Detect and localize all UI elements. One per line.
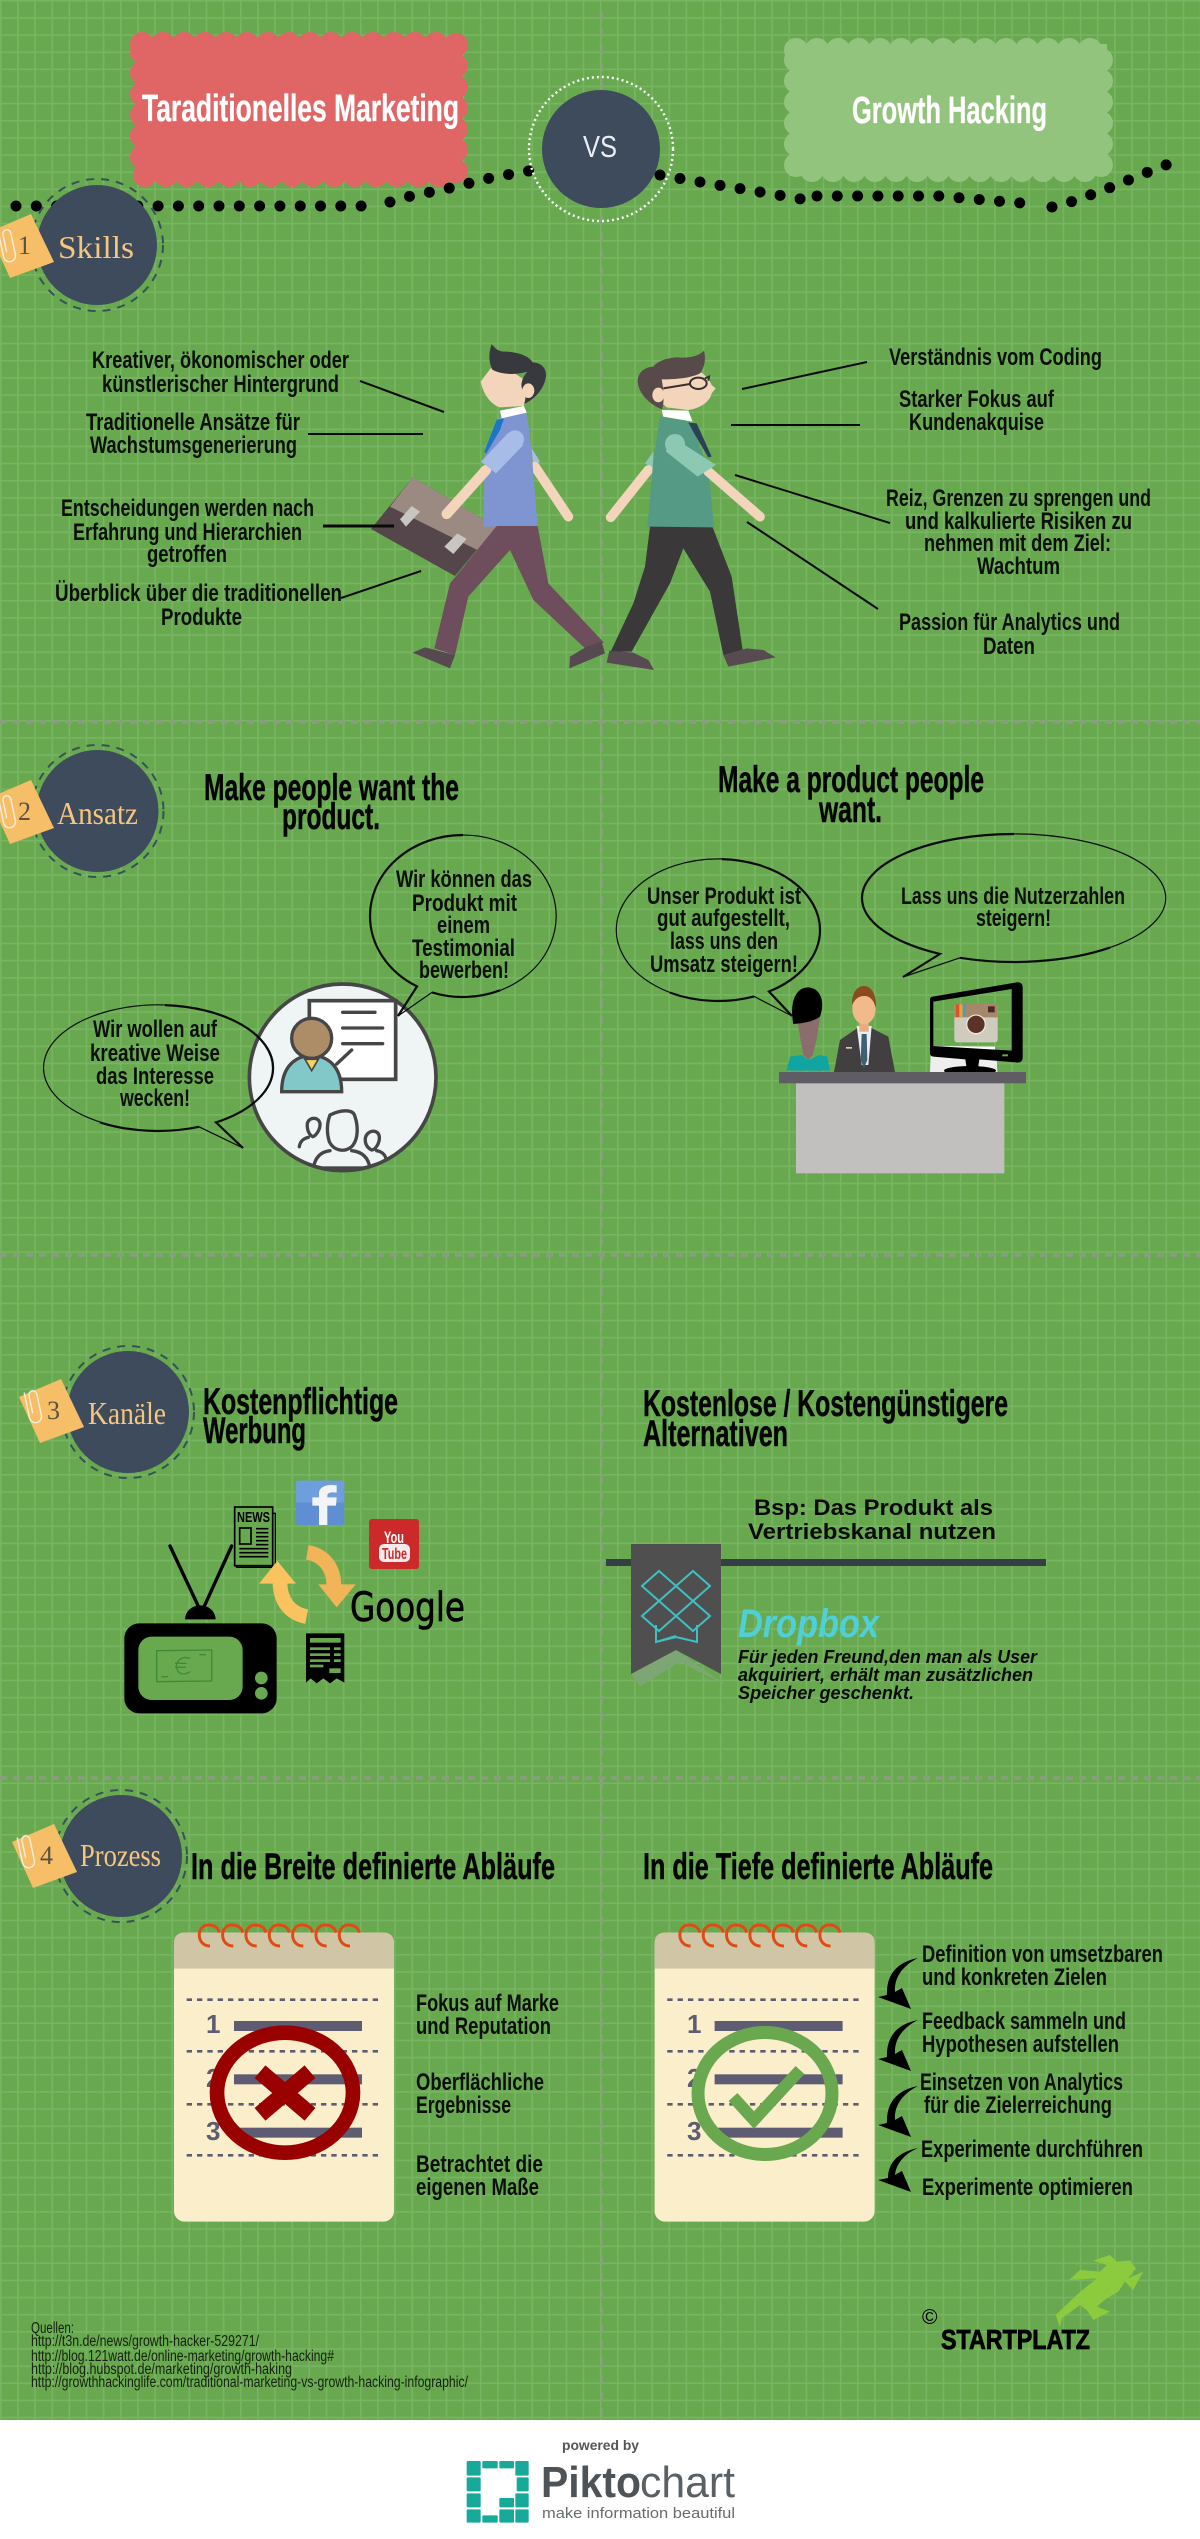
speech bubble: Unser Produkt: Umsatz steigern!: [650, 951, 798, 978]
sources: Quellen:: [31, 2320, 74, 2337]
callout lines for skills: [308, 362, 890, 609]
heading: make people want the product: Make people want the: [204, 767, 459, 808]
dropbox text: Dropbox: [738, 1602, 881, 1646]
panel: skills growth hacking text labels: Starker Fokus auf: [899, 386, 1055, 413]
header: traditional marketing badge: [136, 38, 462, 181]
text: broad process items: Oberflächliche: [416, 2069, 544, 2096]
section marker 1: Skills: [0, 179, 163, 311]
speech bubble: Unser Produkt: [616, 859, 820, 1016]
speech bubble: Wir wollen: Wir wollen auf: [93, 1016, 218, 1043]
text: deep process items: Einsetzen von Analytics: [920, 2069, 1123, 2096]
footer: piktochart wordmark: chart: [640, 2458, 735, 2507]
icon: youtube: Tube: [382, 1546, 407, 1563]
notepad right with check: [655, 1925, 875, 2222]
curved arrows: [878, 1958, 918, 2192]
text: deep process items: Experimente optimieren: [922, 2174, 1133, 2201]
section marker 1: Skills: Skills: [58, 229, 134, 265]
ribbon with dropbox icon: [631, 1544, 726, 1686]
panel: skills traditional text labels: Überblick über die traditionellen: [55, 580, 342, 607]
panel: skills growth hacking text labels: Kundenakquise: [909, 409, 1044, 436]
sources: http://blog.hubspot.de/marketing/growth-haking: [31, 2361, 292, 2378]
header: traditional marketing badge: Taraditionelles Marketing: [142, 88, 459, 130]
speech bubble: Wir wollen: [44, 1005, 274, 1148]
text: deep process items: Feedback sammeln und: [922, 2008, 1126, 2035]
heading: free alternatives: [643, 1383, 1008, 1454]
footer: powered by: powered by: [562, 2437, 639, 2453]
speech bubble: Unser Produkt: lass uns den: [670, 928, 778, 955]
notepad right with check: 1: [687, 2009, 701, 2039]
arrows: cycle: [259, 1552, 356, 1617]
heading: deep processes: In die Tiefe definierte Abläufe: [643, 1846, 993, 1887]
text: broad process items: eigenen Maße: [416, 2174, 539, 2201]
footer: piktochart wordmark: [541, 2458, 735, 2522]
bar: [606, 1559, 1046, 1566]
heading: make a product people want: Make a product people: [718, 759, 984, 800]
dropbox text: Speicher geschenkt.: [738, 1683, 914, 1703]
dropbox text: akquiriert, erhält man zusätzlichen: [738, 1665, 1033, 1685]
panel: skills growth hacking text labels: Passion für Analytics und: [899, 609, 1120, 636]
panel: skills traditional text labels: Erfahrung und Hierarchien: [73, 519, 302, 546]
heading: make people want the product: product.: [282, 796, 380, 837]
icon cluster: paid channels: [124, 1481, 465, 1713]
panel: skills traditional text labels: Traditionelle Ansätze für: [86, 409, 300, 436]
sources: [31, 2320, 469, 2391]
panel: skills traditional text labels: getroffen: [147, 541, 227, 568]
startplatz logo with runner: STARTPLATZ: [941, 2324, 1090, 2355]
panel: skills growth hacking text labels: Wachtum: [977, 553, 1060, 580]
speech bubble: Wir wollen: kreative Weise: [90, 1040, 220, 1067]
icon: youtube: [369, 1519, 419, 1569]
illustration: desk with two people and monitor: [779, 982, 1026, 1173]
text: broad process items: Betrachtet die: [416, 2151, 543, 2178]
notepad left with cross: 2: [206, 2063, 220, 2093]
heading: make people want the product: [204, 767, 459, 837]
google word mark: Google: [350, 1585, 465, 1631]
example heading: Vertriebskanal nutzen: [748, 1519, 996, 1544]
icon: piktochart logo tiles: [467, 2461, 529, 2523]
section marker 2: Ansatz: Ansatz: [57, 795, 138, 831]
section marker 3: Kanäle: Kanäle: [88, 1395, 166, 1431]
text: deep process items: [920, 1941, 1163, 2201]
dropbox text: Für jeden Freund,den man als User: [738, 1647, 1038, 1667]
newspaper label: NEWS: [237, 1509, 270, 1526]
speech bubble: Wir können: Testimonial: [412, 935, 515, 962]
heading: make a product people want: want.: [818, 789, 882, 830]
notepad right with check: 3: [687, 2116, 701, 2146]
panel: skills traditional text labels: Wachstumsgenerierung: [90, 432, 297, 459]
icon: youtube: You: [384, 1528, 404, 1547]
sources: http://blog.121watt.de/online-marketing/growth-hacking#: [31, 2348, 334, 2365]
panel: skills traditional text labels: Entscheidungen werden nach: [61, 495, 314, 522]
icon: facebook: [296, 1481, 344, 1525]
text: deep process items: und konkreten Zielen: [922, 1964, 1107, 1991]
heading: broad processes: In die Breite definierte Abläufe: [191, 1846, 555, 1887]
VS circle: VS: [583, 129, 617, 164]
panel: skills growth hacking text labels: nehmen mit dem Ziel:: [924, 530, 1111, 557]
notepad left with cross: 3: [206, 2116, 220, 2146]
header: growth hacking badge: [790, 44, 1107, 176]
text: broad process items: und Reputation: [416, 2013, 551, 2040]
panel: skills growth hacking text labels: Daten: [983, 633, 1035, 660]
text: deep process items: Hypothesen aufstellen: [922, 2031, 1119, 2058]
sources: http://growthhackinglife.com/traditional-marketing-vs-growth-hacking-infographic/: [31, 2374, 469, 2391]
panel: skills growth hacking text labels: Verständnis vom Coding: [889, 344, 1102, 371]
panel: skills growth hacking text labels: [886, 344, 1151, 660]
section marker 3: Kanäle: 3: [47, 1396, 60, 1425]
speech bubble: Nutzerzahlen: [862, 834, 1166, 977]
panel: skills growth hacking text labels: und kalkulierte Risiken zu: [905, 508, 1132, 535]
speech bubble: Nutzerzahlen: steigern!: [976, 905, 1051, 932]
speech bubble: Wir können: Wir können das: [396, 866, 532, 893]
icon: presenter in circle: [249, 984, 437, 1176]
illustration: growth hacker with glasses: [607, 351, 776, 670]
speech bubble: Wir können: [370, 835, 556, 1016]
startplatz logo with runner: ©: [922, 2306, 938, 2329]
heading: paid advertising: Werbung: [203, 1410, 306, 1451]
footer: piktochart wordmark: make information beautiful: [542, 2505, 735, 2522]
panel: skills traditional text labels: Kreativer, ökonomischer oder: [92, 347, 349, 374]
panel: skills traditional text labels: [55, 347, 349, 631]
section marker 3: Kanäle: [19, 1346, 194, 1478]
heading: free alternatives: Kostenlose / Kostengünstigere: [643, 1383, 1008, 1424]
speech bubble: Wir wollen: wecken!: [119, 1085, 190, 1112]
text: deep process items: für die Zielerreichung: [924, 2092, 1112, 2119]
speech bubble: Wir können: Produkt mit: [412, 890, 517, 917]
speech bubble: Unser Produkt: gut aufgestellt,: [657, 905, 790, 932]
icon: receipt: [306, 1633, 344, 1683]
example heading: Bsp: Das Produkt als: [754, 1495, 993, 1520]
section marker 4: Prozess: Prozess: [80, 1837, 161, 1873]
notepad right with check: 2: [687, 2063, 701, 2093]
notepad left with cross: 1: [206, 2009, 220, 2039]
illustration: traditional marketer with briefcase: [371, 344, 605, 668]
speech bubble: Wir können: einem: [437, 912, 490, 939]
text: broad process items: [416, 1990, 559, 2201]
section marker 1: Skills: 1: [18, 231, 31, 260]
heading: paid advertising: Kostenpflichtige: [203, 1381, 398, 1422]
heading: make a product people want: [718, 759, 984, 830]
speech bubble: Nutzerzahlen: Lass uns die Nutzerzahlen: [901, 883, 1125, 910]
header: growth hacking badge: Growth Hacking: [852, 90, 1047, 132]
panel: skills traditional text labels: Produkte: [161, 604, 242, 631]
sources: http://t3n.de/news/growth-hacker-529271/: [31, 2333, 260, 2350]
text: broad process items: Fokus auf Marke: [416, 1990, 559, 2017]
notepad left with cross: [174, 1925, 394, 2222]
speech bubble: Unser Produkt: Unser Produkt ist: [647, 883, 801, 910]
section marker 2: Ansatz: [0, 745, 164, 877]
speech bubble: Wir können: bewerben!: [419, 957, 509, 984]
footer: piktochart wordmark: Pikto: [541, 2458, 641, 2507]
startplatz logo with runner: [922, 2255, 1143, 2355]
footer: white strip: [0, 2420, 1200, 2539]
section marker 4: Prozess: 4: [40, 1841, 53, 1870]
section marker 2: Ansatz: 2: [18, 797, 31, 826]
heading: free alternatives: Alternativen: [643, 1413, 788, 1454]
dotted connector line: [16, 159, 1181, 207]
icon: television: [124, 1546, 277, 1713]
speech bubble: Wir wollen: das Interesse: [96, 1063, 214, 1090]
VS circle: [529, 77, 673, 221]
icon: newspaper: [234, 1507, 275, 1567]
heading: paid advertising: [203, 1381, 398, 1451]
dropbox text: [738, 1602, 1038, 1703]
section marker 4: Prozess: [12, 1790, 187, 1922]
example heading: [748, 1495, 996, 1544]
panel: skills traditional text labels: künstlerischer Hintergrund: [102, 371, 339, 398]
text: broad process items: Ergebnisse: [416, 2092, 511, 2119]
